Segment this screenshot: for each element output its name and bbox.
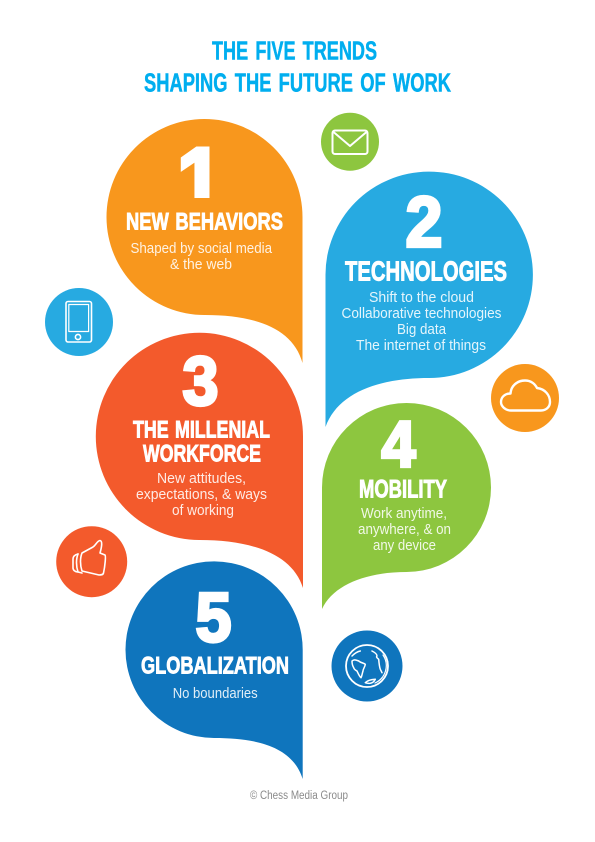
- description: mobility: Work anytime,: [361, 505, 447, 522]
- title: [144, 38, 451, 98]
- description: mobility: [358, 505, 451, 554]
- footer credit: © Chess Media Group: [250, 790, 348, 802]
- heading: globalization: GLOBALIZATION: [141, 653, 289, 680]
- number 1: 1: [177, 130, 223, 230]
- heading: the millenial workforce: THE MILLENIAL: [133, 417, 270, 444]
- number 4: 4: [382, 407, 416, 480]
- icon: phone: [45, 288, 113, 356]
- icon: cloud: [491, 364, 559, 432]
- heading: mobility: MOBILITY: [359, 476, 447, 504]
- icon: globe: [332, 630, 402, 702]
- panel: 5 globalization: [126, 561, 303, 779]
- heading: the millenial workforce: [133, 417, 270, 468]
- description: the millenial workforce: New attitudes,: [157, 470, 246, 487]
- description: new behaviors: Shaped by social media: [130, 240, 273, 257]
- title: SHAPING THE FUTURE OF WORK: [144, 70, 451, 98]
- icon: mail: [321, 113, 379, 171]
- panel: 1 new behaviors: [106, 119, 302, 363]
- description: mobility: any device: [373, 537, 436, 554]
- description: technologies: Shift to the cloud: [369, 289, 474, 306]
- number 2: 2: [406, 183, 442, 262]
- panel: 3 the millenial workforce: [96, 333, 303, 588]
- description: technologies: The internet of things: [356, 337, 486, 354]
- panel: 2 technologies: [325, 172, 533, 427]
- heading: technologies: TECHNOLOGIES: [345, 256, 507, 287]
- number 3: 3: [182, 342, 218, 419]
- description: globalization: No boundaries: [173, 685, 258, 702]
- description: technologies: Big data: [397, 321, 447, 338]
- description: new behaviors: & the web: [170, 256, 232, 273]
- icon: thumbs up: [56, 526, 127, 597]
- description: new behaviors: [130, 240, 273, 273]
- number 5: 5: [196, 578, 232, 656]
- panel: 4 mobility: [322, 403, 491, 609]
- description: the millenial workforce: [136, 470, 267, 519]
- description: the millenial workforce: expectations, & ways: [136, 486, 267, 503]
- heading: the millenial workforce: WORKFORCE: [143, 441, 261, 468]
- description: technologies: [342, 289, 502, 354]
- description: technologies: Collaborative technologies: [342, 305, 502, 322]
- title: THE FIVE TRENDS: [212, 38, 377, 66]
- heading: new behaviors: NEW BEHAVIORS: [126, 209, 283, 236]
- description: mobility: anywhere, & on: [358, 521, 451, 538]
- description: the millenial workforce: of working: [172, 502, 234, 519]
